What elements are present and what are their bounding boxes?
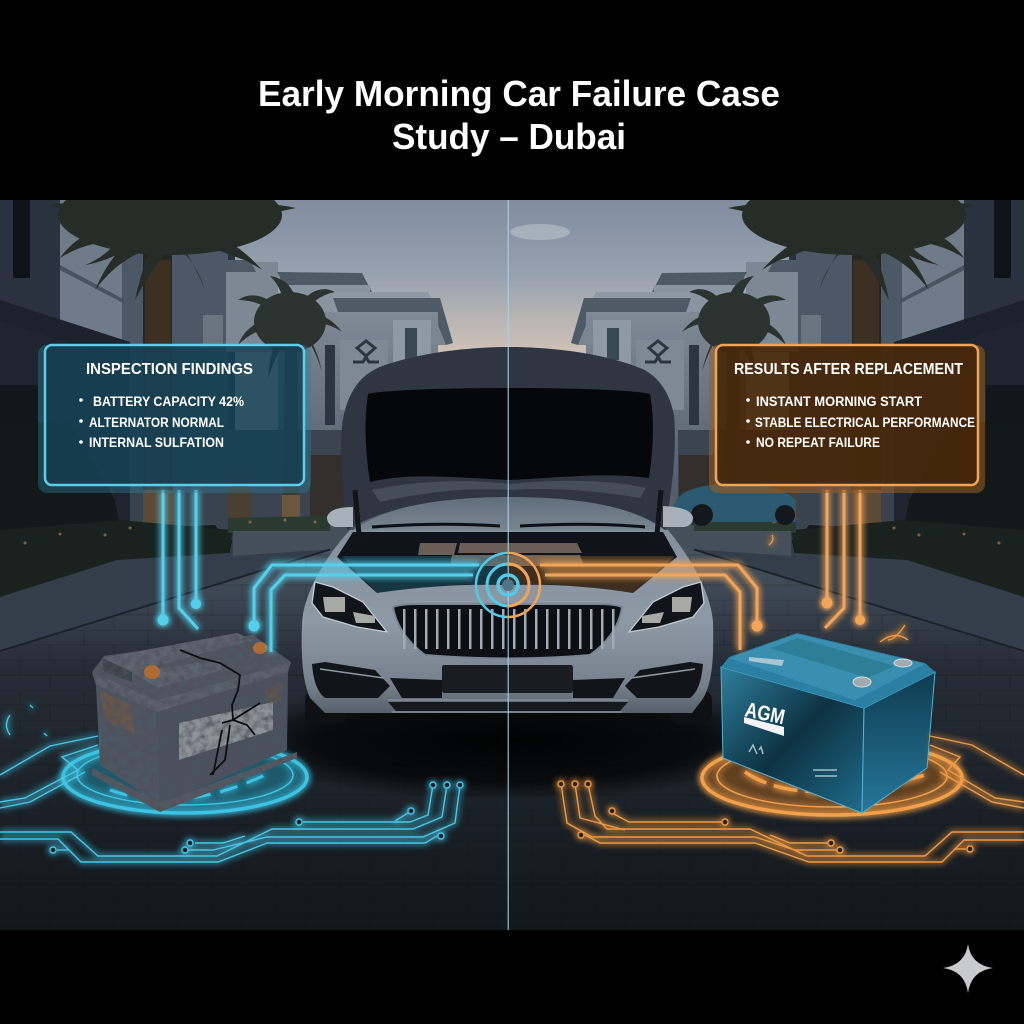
battery body — [721, 667, 864, 813]
panel: results after replacement — [709, 345, 985, 493]
circuit traces: orange — [558, 535, 1024, 862]
car tyres — [305, 690, 712, 724]
battery terminals — [853, 659, 912, 687]
battery ring: orange — [702, 741, 962, 815]
left headlight — [312, 582, 387, 632]
lower lip — [388, 702, 628, 711]
panel: inspection findings — [38, 345, 311, 493]
panel heading: INSPECTION FINDINGS — [86, 361, 253, 378]
centre divider line — [508, 200, 509, 930]
licence plate recess — [442, 665, 573, 693]
title: Early Morning Car Failure Case — [258, 73, 780, 114]
AGM battery — [702, 633, 962, 815]
central hub rings — [476, 553, 540, 617]
battery crack — [180, 650, 260, 775]
circuit traces: cyan — [0, 705, 463, 862]
results list — [746, 394, 975, 450]
front air intakes — [312, 662, 703, 698]
old battery — [63, 633, 307, 813]
car windshield — [350, 496, 668, 532]
open hood — [341, 347, 675, 530]
car body — [302, 530, 713, 713]
results list: INSTANT MORNING START — [756, 394, 923, 409]
battery safety marks — [749, 745, 837, 776]
battery ring: cyan — [63, 741, 307, 813]
icon: four-point sparkle — [943, 944, 993, 993]
panel connectors: cyan — [158, 490, 479, 652]
title — [258, 73, 780, 157]
findings list — [79, 394, 244, 450]
results list: NO REPEAT FAILURE — [756, 435, 880, 450]
side mirrors — [327, 507, 353, 527]
engine bay — [337, 532, 677, 593]
results list: STABLE ELECTRICAL PERFORMANCE — [755, 415, 975, 430]
right headlight — [629, 582, 704, 632]
panel heading: RESULTS AFTER REPLACEMENT — [734, 361, 963, 378]
rusty terminals — [144, 642, 267, 679]
scene: dusk street photo — [0, 175, 1024, 930]
panel connectors: orange — [540, 490, 865, 650]
AGM label: AGM — [743, 698, 787, 729]
battery lid — [721, 633, 935, 708]
grille — [393, 604, 622, 658]
findings list: BATTERY CAPACITY 42% — [93, 394, 244, 409]
hood struts — [355, 490, 661, 546]
title: Study – Dubai — [392, 116, 626, 157]
battery body — [92, 633, 297, 812]
findings list: INTERNAL SULFATION — [89, 435, 224, 450]
car — [302, 347, 713, 724]
findings list: ALTERNATOR NORMAL — [89, 415, 224, 430]
